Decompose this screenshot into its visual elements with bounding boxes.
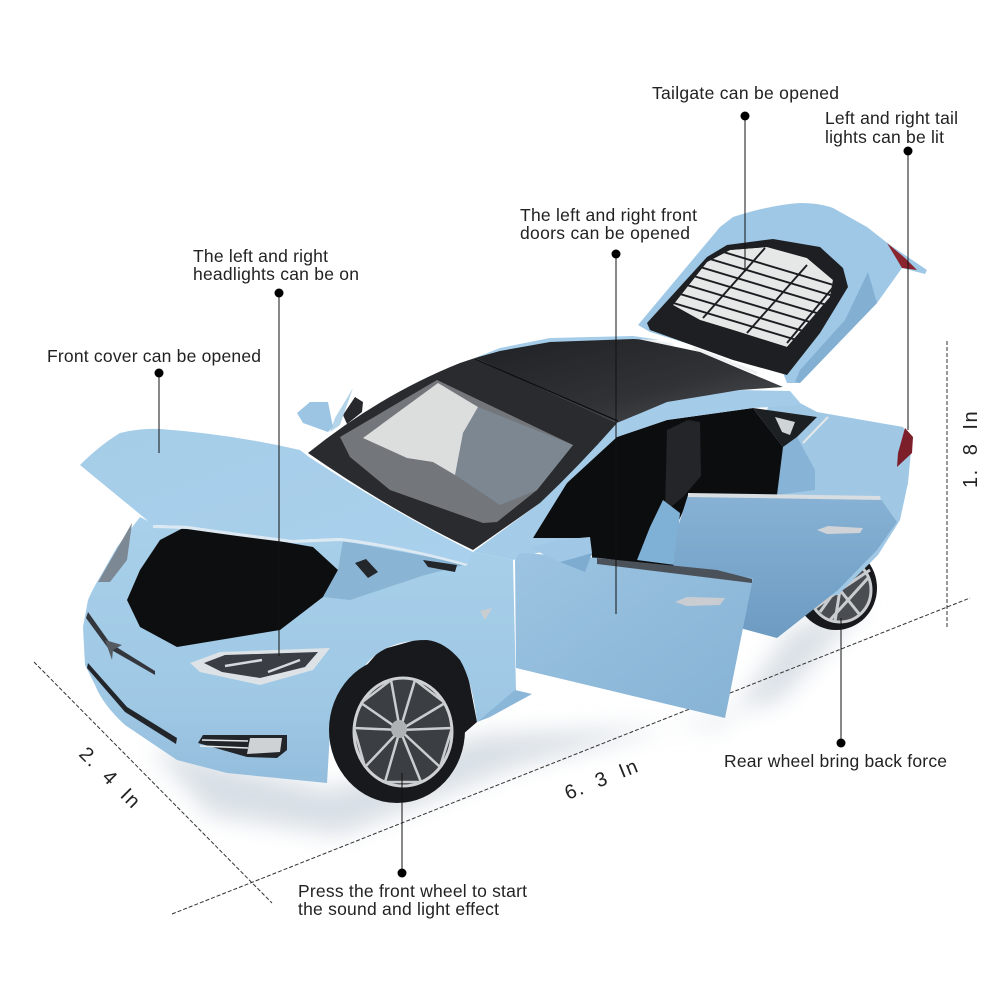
main body xyxy=(83,517,516,783)
blue seat trim xyxy=(637,500,680,565)
width label: 2. 4 In xyxy=(74,743,145,814)
engine bay details xyxy=(355,559,457,578)
rear door open xyxy=(673,493,897,638)
callout: headlights: headlights can be on xyxy=(193,264,359,284)
headlight xyxy=(190,648,330,685)
engine bay xyxy=(323,541,468,600)
lower grille xyxy=(87,663,177,744)
tailgate open xyxy=(638,203,927,383)
callout: rear wheel xyxy=(724,618,947,771)
windshield highlight xyxy=(363,383,478,475)
car model xyxy=(80,203,927,803)
far headlight xyxy=(98,523,132,582)
roof edge xyxy=(475,336,660,358)
ground shadow xyxy=(150,600,870,835)
callout: tail lights: lights can be lit xyxy=(825,127,944,147)
pillar band xyxy=(473,390,802,560)
tail light side xyxy=(897,428,913,467)
callout: front doors: The left and right front xyxy=(520,205,697,225)
windshield xyxy=(308,358,617,550)
windshield glass xyxy=(340,380,573,523)
front wheel xyxy=(329,657,465,803)
callout: tailgate xyxy=(652,83,839,272)
callout: tailgate: Tailgate can be opened xyxy=(652,83,839,103)
dimension: width xyxy=(34,662,272,903)
tailgate hinge trim xyxy=(643,340,757,373)
rear window defroster grille xyxy=(673,247,833,347)
hood open xyxy=(80,429,473,566)
fog light xyxy=(198,735,287,758)
callout: front cover xyxy=(47,346,261,453)
wheel arch xyxy=(345,636,477,740)
rear wheel xyxy=(795,546,877,630)
side marker xyxy=(480,608,492,620)
nose badge xyxy=(105,640,122,660)
front door open xyxy=(515,553,753,718)
cabin interior xyxy=(533,408,783,572)
callout: rear wheel: Rear wheel bring back force xyxy=(724,751,947,771)
callout: front doors: doors can be opened xyxy=(520,223,690,243)
callout: tail lights xyxy=(825,108,958,430)
front trunk cavity xyxy=(127,528,338,647)
rear quarter window xyxy=(753,408,828,447)
callout: front wheel xyxy=(298,773,527,919)
callout: headlights xyxy=(193,246,359,656)
nose trim xyxy=(86,612,155,675)
callout: front wheel: the sound and light effect xyxy=(298,899,499,919)
rear body shading xyxy=(777,437,815,495)
roof seam xyxy=(475,359,618,421)
lower sill xyxy=(477,690,532,722)
rear body xyxy=(740,400,912,600)
callout: headlights: The left and right xyxy=(193,246,328,266)
dimension: length xyxy=(172,598,970,914)
callout: front doors xyxy=(520,205,697,614)
front seat xyxy=(665,420,701,512)
callout: front wheel: Press the front wheel to start xyxy=(298,881,527,901)
front door mirror xyxy=(530,537,592,572)
height label: 1. 8 In xyxy=(960,410,982,488)
far mirror xyxy=(297,388,363,432)
windshield reflection xyxy=(455,407,573,505)
roof xyxy=(475,338,783,423)
length label: 6. 3 In xyxy=(562,755,642,805)
callout: front cover: Front cover can be opened xyxy=(47,346,261,366)
callout: tail lights: Left and right tail xyxy=(825,108,958,128)
rear window frame xyxy=(647,239,848,375)
